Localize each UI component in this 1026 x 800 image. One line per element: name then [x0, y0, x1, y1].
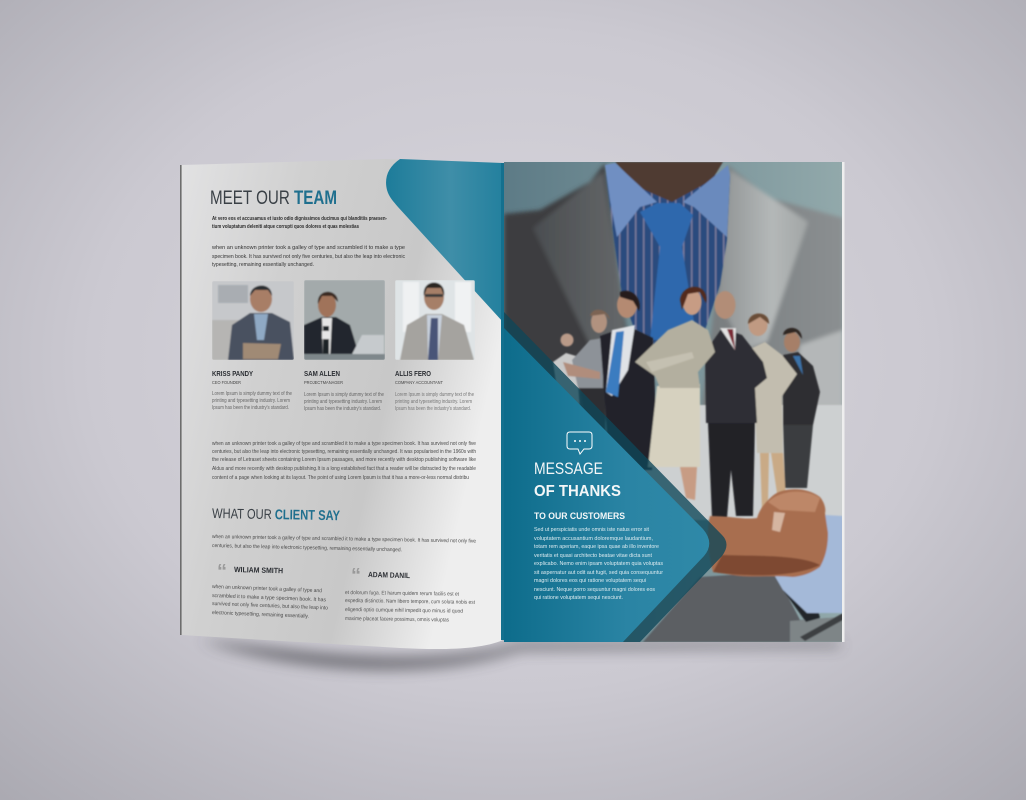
testimonial: William Smith: scrambled it to make a type specimen book. It has	[212, 593, 326, 603]
testimonial: William Smith	[212, 561, 328, 620]
person 5	[708, 423, 755, 518]
long paragraph: when an unknown printer took a galley of type and scrambled it to make a type specimen book. It has survived not only five	[212, 441, 476, 447]
team member: Allis Fero: printing and typesetting industry. Lorem	[395, 399, 472, 405]
person 1	[560, 334, 574, 346]
intro text: tium voluptatum deleniti atque corrupti quos dolores et quas molestias	[212, 224, 359, 230]
page shadow	[200, 640, 840, 670]
testimonial: Adam Danil: expedita distinctio. Nam libero tempore, cum soluta nobis est	[345, 598, 476, 606]
team photo: Allis Fero	[395, 280, 475, 360]
page edge	[842, 162, 844, 642]
testimonial: William Smith: electronic typesetting, remaining essentially.	[212, 610, 309, 620]
team member: Sam Allen	[304, 369, 384, 412]
person 7	[784, 332, 800, 352]
team member: Kriss Pandy: CEO FOUNDER	[212, 380, 241, 386]
testimonial: William Smith: when an unknown printer took a galley of type and	[212, 584, 322, 594]
icon: speech bubble	[567, 432, 592, 454]
testimonial: Adam Danil: “	[351, 565, 361, 587]
customer message text: magni dolores eos qui ratione voluptatem sequi	[534, 578, 646, 584]
person 2	[591, 311, 607, 333]
long paragraph: the release of Letraset sheets containing Lorem Ipsum passages, and more recently with desktop publishing software like	[212, 457, 476, 463]
team member: Sam Allen: PROJECTMANAGER	[304, 380, 343, 386]
intro text: At vero eos et accusamus et iusto odio dignissimos ducimus qui blanditiis praesen-	[212, 216, 387, 222]
team member: Allis Fero: ALLIS FERO	[395, 369, 431, 378]
heading: message of thanks: MESSAGE	[534, 459, 603, 478]
team member: Sam Allen: printing and typesetting industry. Lorem	[304, 399, 382, 405]
photo background	[504, 162, 843, 642]
hand	[643, 489, 843, 642]
customer message text: Sed ut perspiciatis unde omnis iste natus error sit	[534, 527, 650, 533]
testimonial: William Smith: survived not only five centuries, but also the leap into	[212, 601, 328, 611]
shirt cuff	[773, 515, 843, 613]
necktie	[640, 203, 697, 340]
intro text	[212, 216, 387, 230]
suit left	[504, 163, 640, 420]
lower jacket	[643, 574, 802, 642]
long paragraph	[212, 441, 476, 481]
team photo: Sam Allen	[304, 280, 385, 360]
testimonial: William Smith: WILIAM SMITH	[234, 565, 283, 575]
heading: message of thanks	[534, 462, 620, 496]
customer message text: nesciunt. Neque porro sequuntur magni dolores eos	[534, 587, 655, 593]
body paragraph: typesetting, remaining essentially unchanged.	[212, 262, 314, 268]
testimonial: Adam Danil: eligendi optio cumque nihil impedit quo minus id quod	[345, 607, 463, 615]
testimonial: Adam Danil: maxime placeat facere possimus, omnis voluptas	[345, 616, 449, 623]
customer message text: qui ratione voluptatem sequi nesciunt.	[534, 595, 623, 601]
shirt	[606, 175, 730, 345]
team member: Kriss Pandy: printing and typesetting industry. Lorem	[212, 398, 290, 404]
heading: message of thanks: OF THANKS	[534, 483, 621, 500]
team member: Allis Fero	[395, 369, 474, 412]
heading: what our client say: WHAT OUR CLIENT SAY	[212, 505, 341, 523]
testimonial: William Smith: “	[217, 561, 227, 583]
customer message text	[534, 527, 663, 601]
team member: Sam Allen: Lorem Ipsum is simply dummy text of the	[304, 392, 384, 398]
dark translucent diagonal band	[504, 312, 726, 642]
small team figures	[553, 287, 820, 518]
customer message text: totam rem aperiam, eaque ipsa quae ab illo inventore	[534, 544, 659, 550]
body paragraph: when an unknown printer took a galley of type and scrambled it to make a type	[211, 245, 405, 251]
testimonial: Adam Danil	[345, 565, 476, 623]
team member: Allis Fero: COMPANY ACCOUNTANT	[395, 380, 443, 386]
person 3	[600, 326, 656, 470]
customer message text: explicabo. Nemo enim ipsam voluptatem quia voluptas	[534, 561, 663, 567]
client intro text: centuries, but also the leap into electronic typesetting, remaining essentially unchanged.	[212, 543, 402, 553]
teal corner shape	[386, 159, 503, 322]
photo: businessman with team in hand	[504, 162, 843, 642]
teal diagonal panel	[504, 328, 709, 643]
panel: left page	[180, 159, 504, 649]
team member: Allis Fero: Lorem Ipsum is simply dummy text of the	[395, 392, 474, 398]
team member: Kriss Pandy: Ipsum has been the industry's standard.	[212, 405, 289, 411]
customer message text: sit aspernatur aut odit aut fugit, sed quia consequuntur	[534, 570, 663, 576]
testimonial: Adam Danil: et dolorum fuga. Et harum quidem rerum facilis est et	[345, 590, 460, 598]
person 4	[680, 467, 697, 500]
team member: Kriss Pandy	[212, 369, 292, 411]
long paragraph: content of a page when looking at its layout. The point of using Lorem Ipsum is that it has a more-or-less normal distribu	[212, 475, 469, 481]
testimonial: Adam Danil: ADAM DANIL	[368, 570, 410, 580]
team member: Kriss Pandy: KRISS PANDY	[212, 369, 253, 378]
client intro text: when an unknown printer took a galley of type and scrambled it to make a type specimen book. It has survived not only five	[212, 534, 476, 545]
person 6	[760, 453, 786, 510]
neck	[615, 162, 723, 202]
customer message text: veritatis et quasi architecto beatae vitae dicta sunt	[534, 553, 653, 559]
team member: Kriss Pandy: Lorem Ipsum is simply dummy text of the	[212, 391, 292, 397]
shirt collars	[605, 163, 657, 237]
lower backdrop	[640, 405, 843, 520]
team member: Allis Fero: Ipsum has been the industry's standard.	[395, 406, 471, 412]
hand shape	[708, 489, 828, 577]
team photo: Kriss Pandy	[212, 281, 294, 360]
body paragraph	[211, 245, 405, 268]
customer message text: voluptatem accusantium doloremque laudantium,	[534, 536, 653, 542]
team member: Sam Allen: Ipsum has been the industry's standard.	[304, 406, 381, 412]
long paragraph: Aldus and more recently with desktop publishing.It is a long established fact that a reader will be distracted by the readable	[212, 466, 476, 472]
client intro text	[212, 534, 476, 553]
body paragraph: specimen book. It has survived not only five centuries, but also the leap into electronic	[212, 254, 405, 260]
panel: right page	[504, 162, 843, 643]
subheading: to our customers: TO OUR CUSTOMERS	[534, 511, 625, 521]
suit right	[700, 165, 843, 420]
heading: meet our team: MEET OUR TEAM	[210, 188, 337, 209]
team member: Sam Allen: SAM ALLEN	[304, 369, 340, 378]
long paragraph: centuries, but also the leap into electronic typesetting, remaining essentially unchanged. It was popularised in the 1960s with	[212, 449, 476, 455]
